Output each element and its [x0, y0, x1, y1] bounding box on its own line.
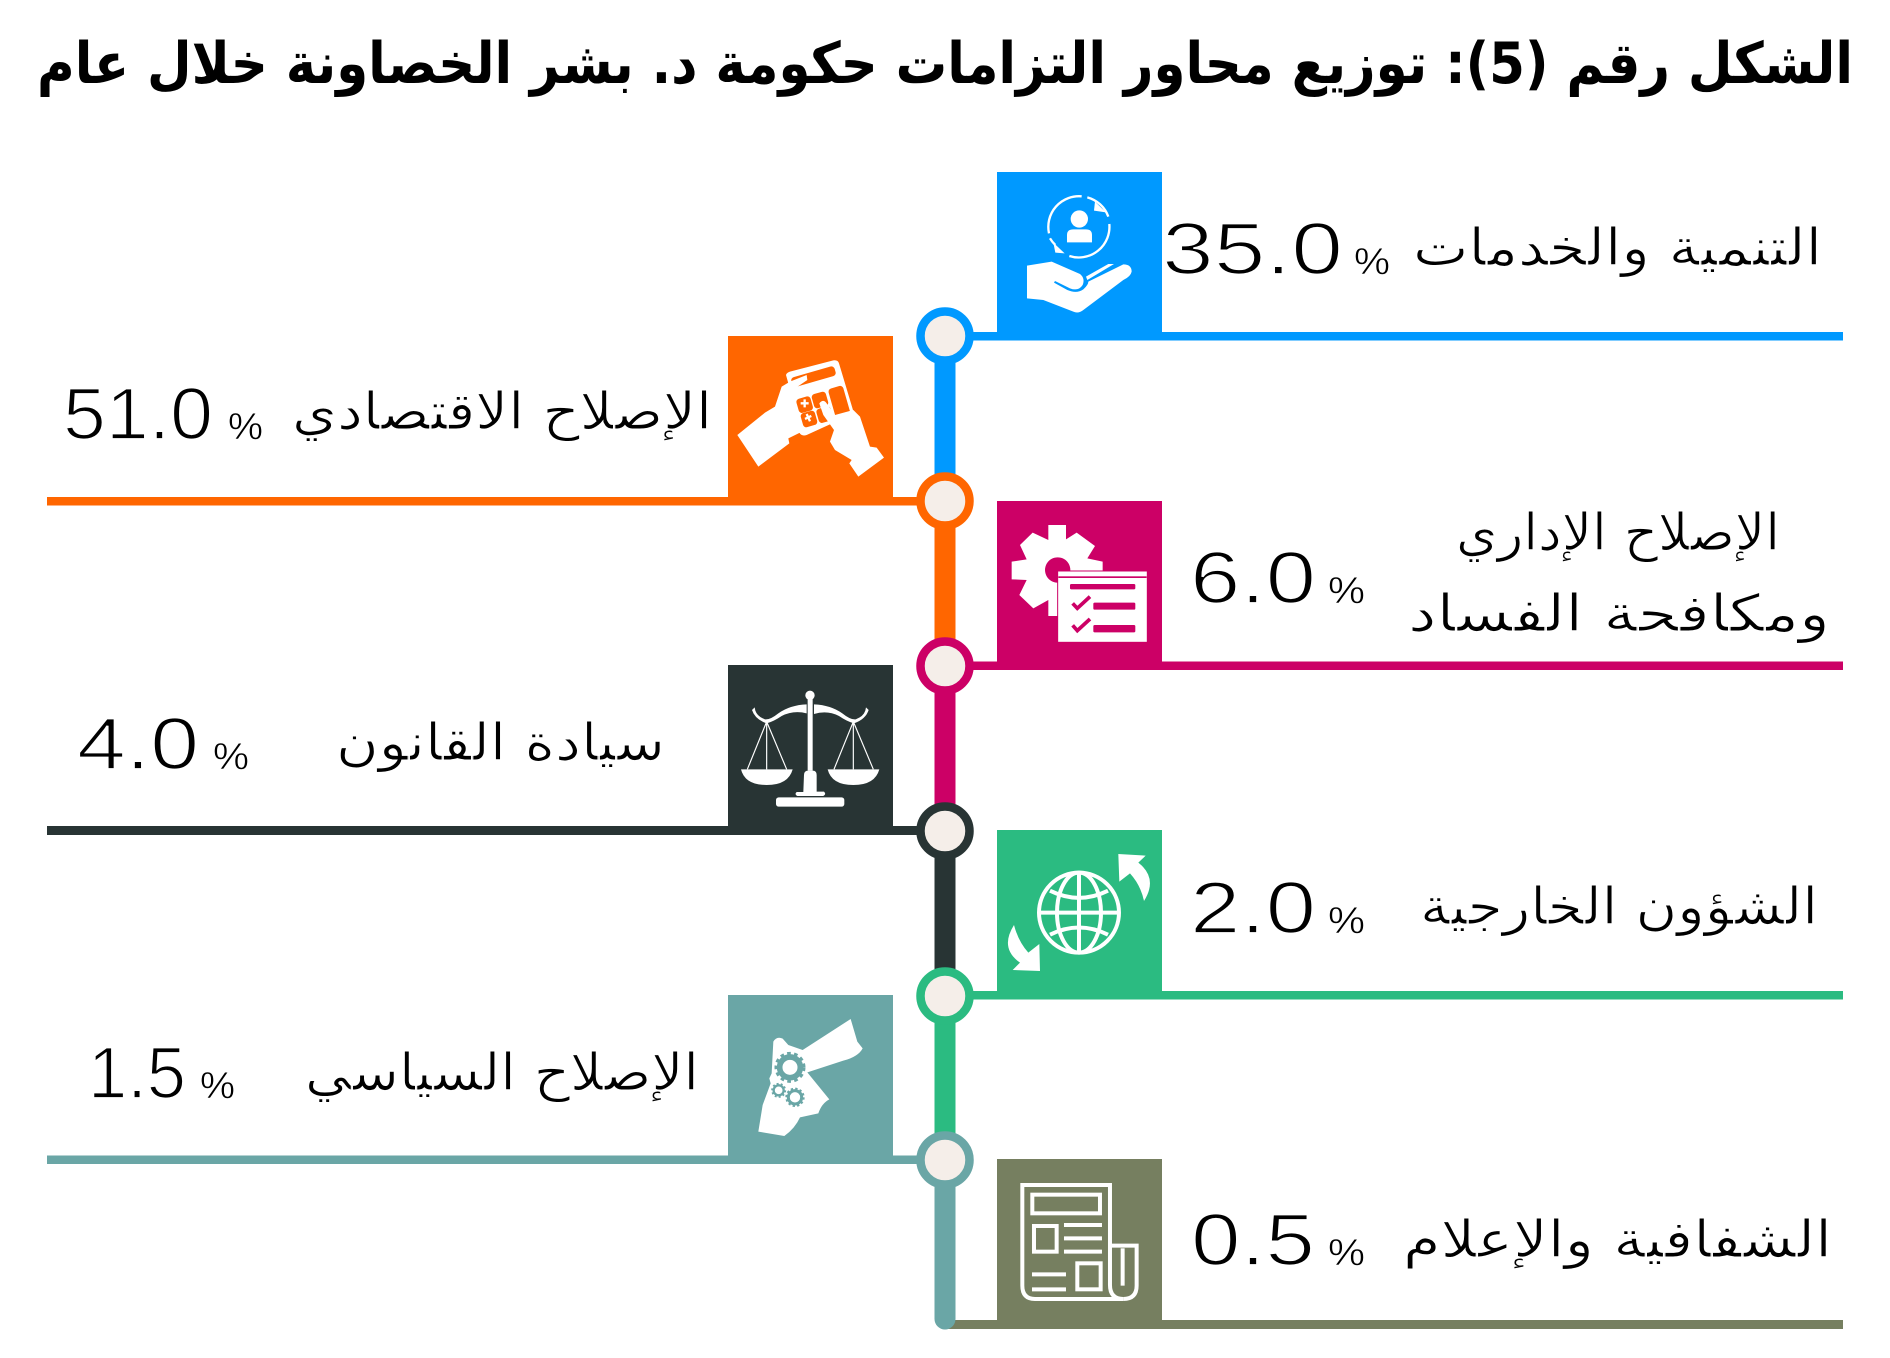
- label: rule of law: سيادة القانون: [336, 714, 665, 773]
- label: transparency and media: الشفافية والإعلام: [1403, 1211, 1832, 1270]
- icon square: services: [997, 172, 1162, 334]
- value: 1.5 percent: 1.5: [88, 1033, 186, 1114]
- horizontal rule: rule of law: [47, 826, 945, 835]
- icon square: rule of law: [728, 665, 893, 828]
- horizontal rule: political reform: [47, 1156, 945, 1164]
- node: orange: [920, 476, 970, 526]
- icon: newspaper: [1022, 1185, 1137, 1299]
- icon: scales of justice: [741, 691, 879, 807]
- label line 1: administrative reform: الإصلاح الإداري: [1456, 504, 1780, 563]
- icon square: administrative reform: [997, 501, 1162, 664]
- percent sign: %: [213, 736, 249, 778]
- value: 2.0 percent: 2.0: [1190, 868, 1316, 949]
- label line 2: anti-corruption: ومكافحة الفساد: [1408, 585, 1830, 644]
- node: blue: [920, 312, 970, 360]
- horizontal rule: foreign affairs: [945, 991, 1843, 1000]
- value: 6.0 percent: 6.0: [1190, 538, 1316, 619]
- node: dark: [920, 806, 970, 856]
- label: development and services: التنمية والخدمات: [1413, 219, 1822, 278]
- icon: map of Jordan with gears: [758, 1019, 863, 1136]
- horizontal rule: administrative reform: [945, 662, 1843, 670]
- icon: hands on calculator: [737, 360, 884, 477]
- panel: development and services: [945, 172, 1843, 340]
- panel: transparency and media: [945, 1159, 1843, 1329]
- panel: foreign affairs: [945, 830, 1843, 1000]
- title: الشكل رقم (5): توزيع محاور التزامات حكومة د. بشر الخصاونة خلال عام: [37, 31, 1853, 97]
- panel: political reform: [47, 995, 945, 1164]
- horizontal rule: services: [945, 332, 1843, 340]
- value: 35.0 percent: 35.0: [1162, 209, 1343, 290]
- percent sign: %: [200, 1065, 235, 1107]
- node: magenta: [920, 642, 970, 690]
- node: teal: [920, 1136, 970, 1184]
- label: economic reform: الإصلاح الاقتصادي: [292, 383, 712, 442]
- timeline spine: [934, 336, 956, 1160]
- icon square: foreign affairs: [997, 830, 1162, 993]
- panel: economic reform: [47, 336, 945, 506]
- label: political reform: الإصلاح السياسي: [305, 1044, 699, 1103]
- horizontal rule: transparency and media: [945, 1320, 1843, 1329]
- icon square: transparency and media: [997, 1159, 1162, 1322]
- value: 0.5 percent: 0.5: [1191, 1200, 1315, 1281]
- icon: hand holding person: [1027, 196, 1132, 313]
- panel: administrative reform and anti-corruption: [945, 501, 1843, 670]
- label: foreign affairs: الشؤون الخارجية: [1420, 878, 1818, 937]
- icon: gear and checklist: [1012, 525, 1147, 642]
- timeline end segment: [934, 1160, 956, 1330]
- value: 51.0 percent: 51.0: [63, 374, 213, 455]
- percent sign: %: [1328, 1232, 1365, 1274]
- percent sign: %: [228, 406, 263, 448]
- percent sign: %: [1328, 570, 1365, 612]
- icon square: economic reform: [728, 336, 893, 499]
- value: 4.0 percent: 4.0: [77, 704, 199, 785]
- percent sign: %: [1354, 241, 1390, 283]
- icon: globe with arrows: [1008, 854, 1150, 971]
- icon square: political reform: [728, 995, 893, 1157]
- horizontal rule: economic reform: [47, 497, 945, 506]
- percent sign: %: [1328, 900, 1365, 942]
- panel: rule of law: [47, 665, 945, 835]
- node: green: [920, 972, 970, 1020]
